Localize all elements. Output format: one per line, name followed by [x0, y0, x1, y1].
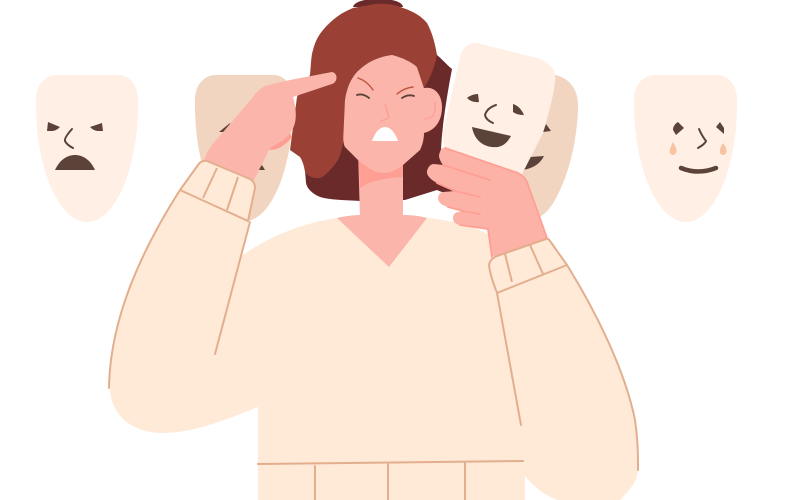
- hair: back layer and bun: [305, 0, 457, 201]
- body: sweater: [109, 190, 638, 500]
- hair: front layer: [290, 4, 437, 178]
- eyes squinting: [357, 94, 414, 98]
- hand: holding mask: [427, 148, 547, 257]
- icon: back mask right: [500, 75, 578, 219]
- icon: back mask left: [195, 75, 293, 221]
- angry mouth: [372, 127, 398, 141]
- cuff: right sleeve: [489, 239, 567, 293]
- hand: pointing at temple: [203, 72, 336, 182]
- icon: held happy mask: [443, 43, 555, 178]
- icon: crying mask: [634, 75, 737, 222]
- nose and ear lines: [381, 102, 435, 121]
- icon: angry mask: [36, 75, 138, 222]
- v-neck collar: [337, 215, 427, 267]
- cuff: left sleeve: [180, 161, 255, 221]
- eyebrows: [358, 78, 413, 94]
- neck: [358, 150, 403, 218]
- face: [343, 55, 442, 173]
